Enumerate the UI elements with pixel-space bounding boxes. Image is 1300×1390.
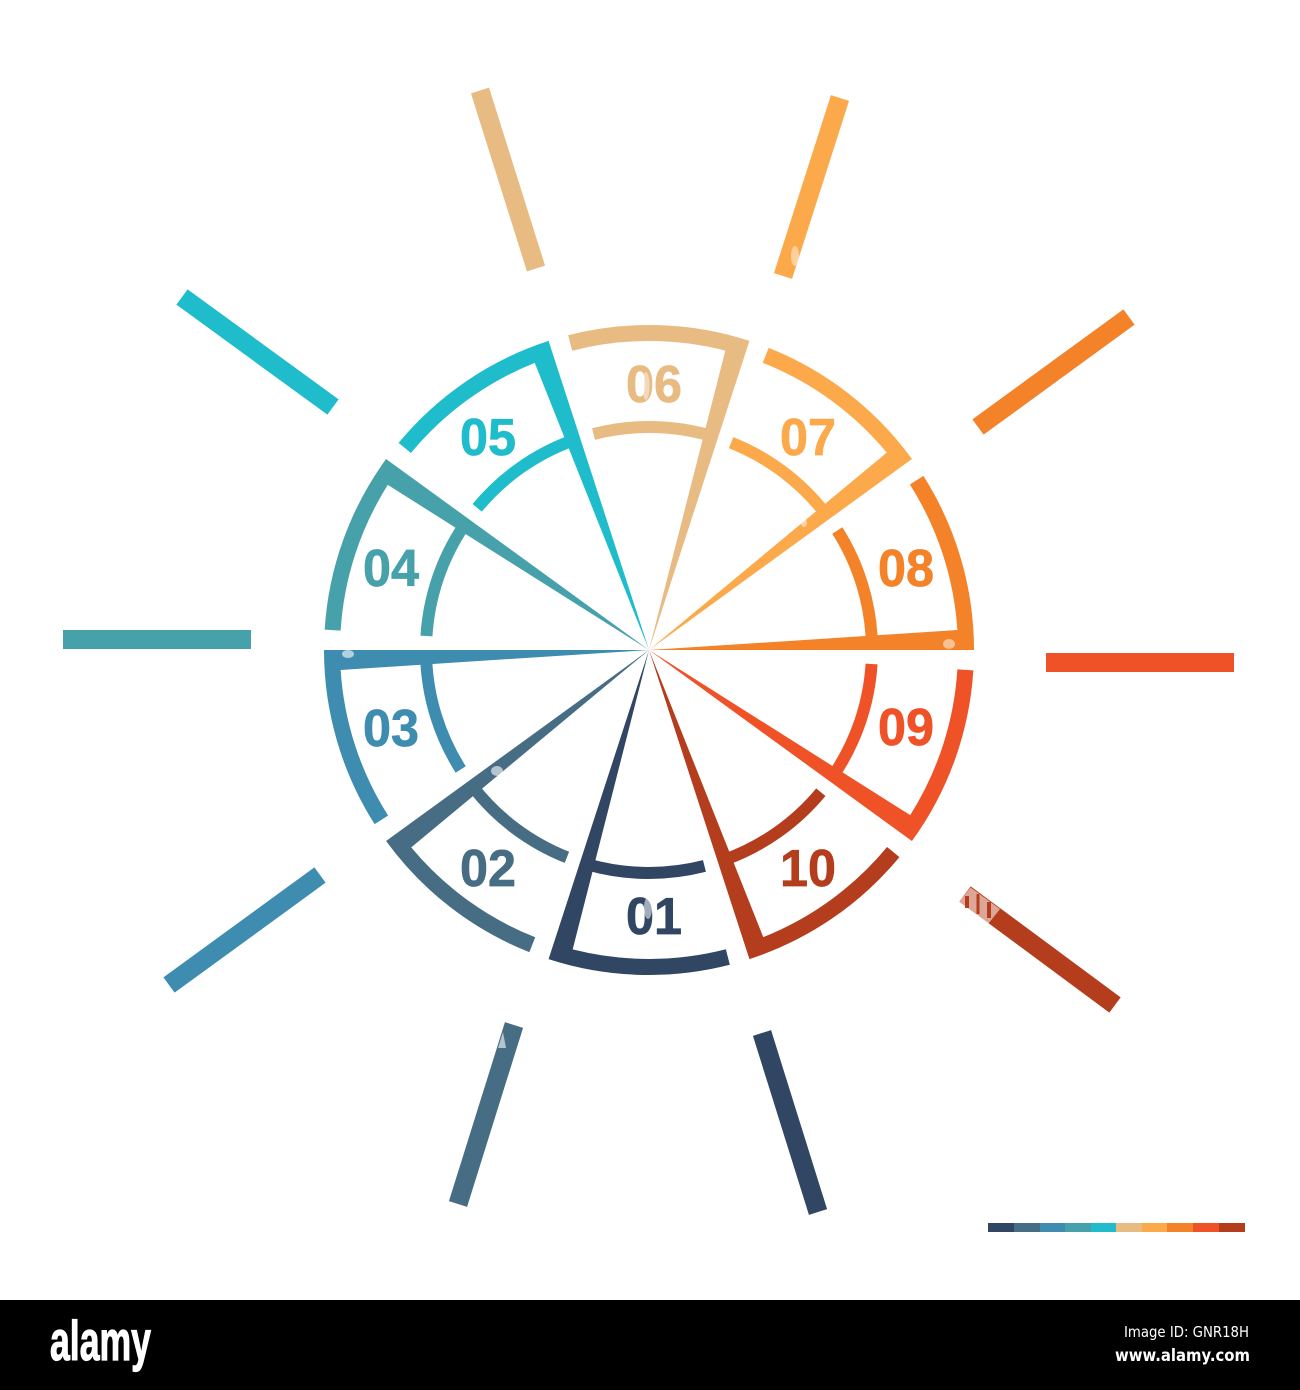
- ray 01: [762, 1033, 818, 1212]
- segment 01: [549, 650, 815, 1013]
- segment 01: 01: [626, 888, 682, 946]
- ray 10: [965, 894, 1115, 1005]
- segment 09: 09: [878, 699, 934, 757]
- ray 08: [978, 317, 1129, 427]
- segment 06: [483, 287, 749, 650]
- segment 03: [324, 650, 649, 824]
- segment 02: [386, 650, 751, 982]
- segment 07: 07: [780, 409, 836, 467]
- ray 06: [480, 90, 536, 268]
- ray 05: [182, 297, 333, 407]
- segment 10: 10: [780, 840, 836, 898]
- ray 02: [458, 1025, 514, 1204]
- watermark footer bar: alamy: [50, 1309, 151, 1372]
- segment 09: [649, 509, 1014, 841]
- watermark footer bar: [0, 1300, 1300, 1390]
- segment 04: 04: [363, 540, 419, 598]
- ray 09: [1046, 653, 1234, 672]
- colour legend strip: [988, 1223, 1245, 1232]
- faded watermark fragments over the artwork: [342, 246, 1000, 1048]
- segment 07: [547, 318, 912, 650]
- ray 04: [63, 630, 251, 649]
- ray 03: [169, 875, 320, 985]
- segment 05: 05: [460, 409, 516, 467]
- segment 03: 03: [363, 700, 419, 758]
- segment 05: [383, 341, 649, 704]
- segment 10: [649, 596, 915, 959]
- segment 08: [649, 476, 974, 650]
- segment 08: 08: [878, 540, 934, 598]
- segment 02: 02: [460, 840, 516, 898]
- segment 04: [284, 459, 649, 791]
- segment 06: 06: [626, 356, 682, 414]
- watermark footer bar: www.alamy.com: [1115, 1346, 1250, 1366]
- watermark footer bar: Image ID: GNR18H: [1124, 1323, 1249, 1341]
- ray 07: [783, 98, 840, 276]
